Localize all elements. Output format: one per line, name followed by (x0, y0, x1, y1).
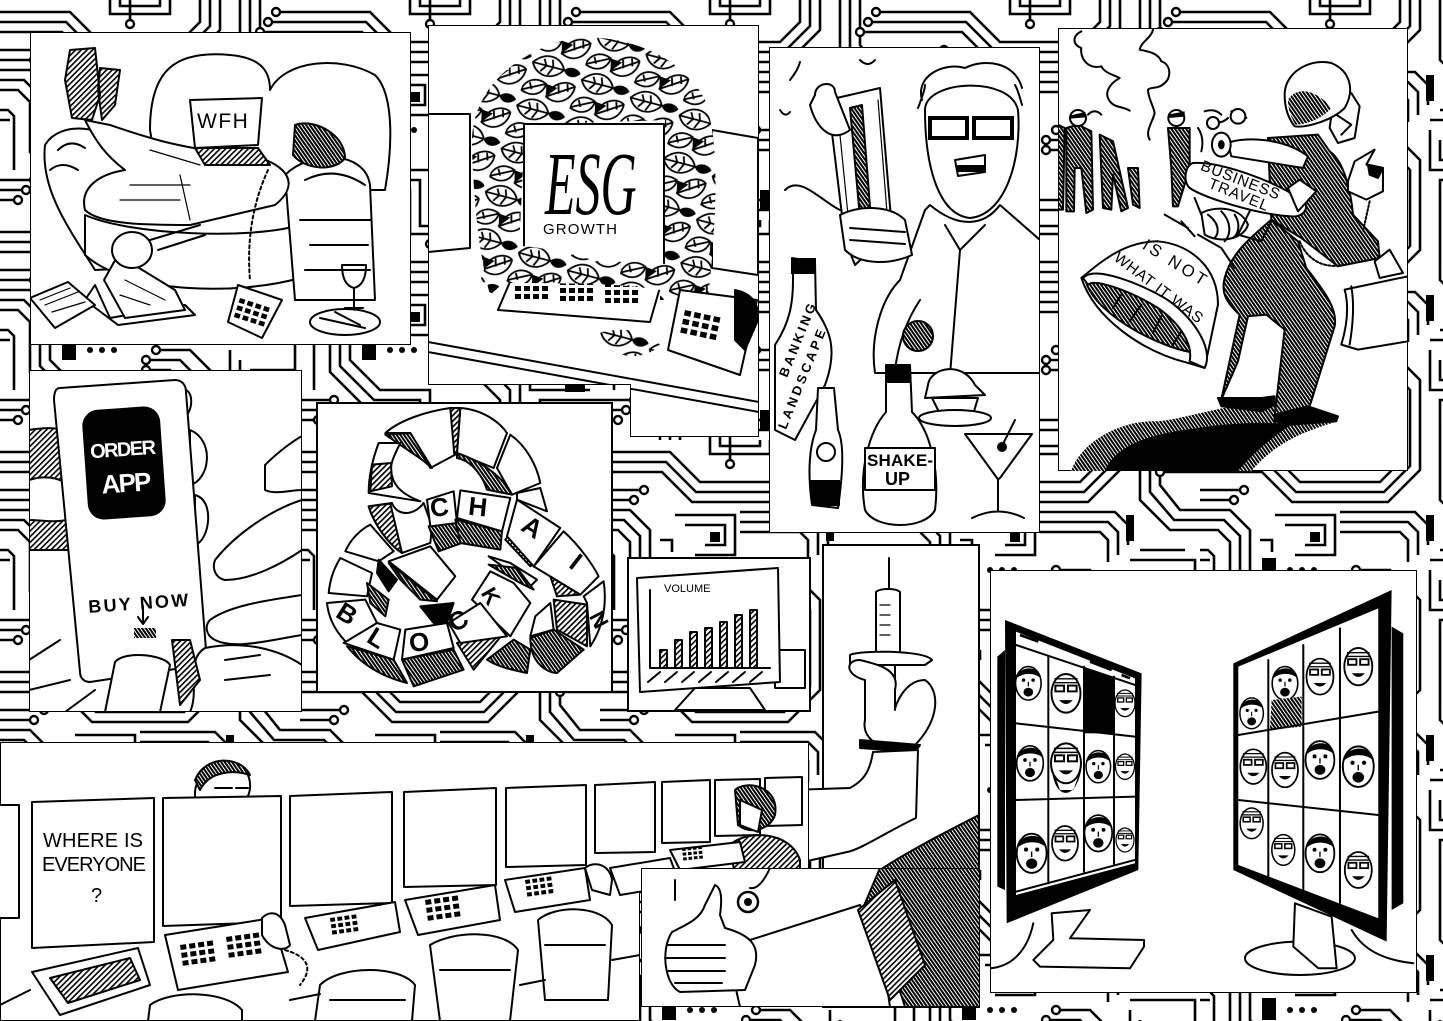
trousers (1221, 220, 1335, 416)
order app tile: ORDER (89, 437, 157, 463)
rocket nozzle: IS NOT (1139, 235, 1210, 289)
panel: video call monitors (990, 570, 1417, 993)
man's head with glasses (918, 63, 1022, 218)
lower hand and fingers (29, 436, 302, 712)
Business Travel tank: BUSINESS (1198, 158, 1282, 203)
torso and sleeve (1268, 135, 1380, 266)
Shake-Up bottle: UP (885, 469, 910, 489)
trailing ivy (595, 330, 660, 356)
upper loop blocks (369, 408, 547, 511)
telephones (262, 864, 612, 985)
crowd of onlookers (1058, 109, 1246, 213)
where is everyone text (42, 830, 146, 907)
word BLOCK: O (407, 626, 431, 658)
left monitor side ports (997, 650, 1005, 890)
right monitor side ports (1392, 627, 1403, 910)
panel: syringe and arm (790, 545, 979, 1007)
suit sleeve (877, 815, 979, 1007)
cocktail shaker (780, 60, 912, 265)
word BLOCK: L (362, 621, 392, 655)
word CHAIN: C (428, 491, 451, 523)
coffee mug (770, 650, 805, 688)
person lying on the sofa (65, 48, 345, 225)
smartphone (54, 380, 206, 682)
bar chart: VOLUME (664, 583, 710, 595)
bar chart (648, 583, 770, 682)
man peeking over monitors (195, 761, 250, 800)
word BLOCK: C (442, 603, 474, 638)
Banking Landscape bottle (775, 258, 832, 440)
word CHAIN: H (467, 491, 489, 523)
word CHAIN: I (564, 547, 588, 575)
Business Travel tank: TRAVEL (1206, 175, 1271, 215)
Shake-Up bottle: SHAKE- (867, 451, 933, 470)
panel: thumbs up (641, 868, 980, 1007)
desk telephone (668, 290, 758, 375)
ESG screen (524, 124, 664, 266)
ESG screen: ESG (544, 134, 637, 234)
Shake-Up bottle (863, 365, 936, 525)
Banking Landscape bottle: BANKING (776, 301, 819, 379)
rocket nozzle (1081, 235, 1218, 368)
man's shirt and body (874, 205, 1040, 375)
CHAIN blocks (427, 490, 605, 646)
forearm (735, 905, 890, 1007)
desk edges (0, 955, 640, 1005)
panel: ESG growth (428, 25, 759, 437)
thumbs up hand (665, 885, 756, 992)
panel: volume chart monitor (628, 558, 810, 711)
row of monitors (0, 777, 802, 948)
gloved hand (849, 660, 935, 752)
panel: order app (29, 370, 302, 712)
keyboard (481, 246, 665, 323)
arrow and barcode (138, 606, 148, 624)
curled fingers (665, 945, 725, 983)
small bottle (809, 388, 842, 508)
magazine (30, 282, 95, 328)
monitor stand (675, 688, 765, 710)
left monitor (1005, 620, 1142, 923)
order app tile (81, 405, 167, 521)
office chairs (148, 909, 612, 1021)
side monitors (428, 114, 758, 275)
coiled cord (1300, 241, 1341, 266)
panel: shake-up (769, 47, 1040, 533)
helmet head (1285, 62, 1360, 143)
martini glass (965, 420, 1032, 518)
word CHAIN: N (584, 607, 614, 633)
left middle blocks (329, 503, 455, 623)
right monitor (1233, 590, 1392, 942)
monitor (637, 568, 780, 692)
panel: blockchain knot (317, 403, 614, 692)
sleeve-free forearm (790, 750, 918, 865)
smoke plume (1074, 30, 1169, 140)
telephone keypad and cord (228, 170, 282, 338)
Business Travel tank (1186, 158, 1316, 216)
monitor cables (990, 923, 1413, 968)
syringe (850, 558, 932, 720)
BLOCK blocks (327, 600, 507, 686)
control desks with keypads (32, 842, 745, 1015)
woman at desk (730, 785, 800, 877)
holding hand (29, 389, 208, 550)
cupcake on plate (919, 369, 991, 426)
second shadow core (1105, 423, 1291, 471)
where is everyone text: EVERYONE (42, 854, 146, 876)
shoes (1218, 396, 1338, 425)
desk edge (428, 342, 759, 412)
hand with controller (1348, 150, 1383, 231)
baby with bottle (85, 225, 205, 325)
order app tile: APP (100, 466, 152, 500)
ivy wreath (472, 38, 716, 300)
ground shadow (1071, 403, 1338, 471)
shirt cuff stripes (858, 880, 925, 1000)
right monitor stand (1245, 903, 1355, 975)
buy now label: BUY NOW (88, 590, 189, 617)
panel: empty control room (0, 742, 809, 1021)
briefcase (1341, 250, 1408, 350)
rocket engine (1165, 198, 1271, 268)
panel: business travel (1058, 28, 1408, 471)
where is everyone text: ? (91, 885, 102, 907)
word BLOCK: K (476, 583, 506, 609)
word BLOCK: B (331, 596, 363, 631)
laptop with WFH text (190, 98, 270, 165)
sofa (44, 54, 390, 300)
ESG screen: GROWTH (543, 221, 617, 238)
word BLOCK (331, 583, 506, 658)
wine glass and plate (310, 265, 380, 335)
word CHAIN (428, 491, 614, 633)
word CHAIN: A (516, 509, 548, 545)
top oxygen tank (1212, 133, 1308, 168)
Banking Landscape bottle: LANDSCAPE (775, 327, 829, 431)
rocket nozzle: WHAT IT WAS (1111, 249, 1206, 327)
K block and lower blocks (457, 556, 584, 673)
cuff and sleeve (860, 868, 980, 1007)
panel: working from home (30, 32, 411, 345)
where is everyone text: WHERE IS (43, 830, 143, 852)
laptop with WFH text: WFH (197, 110, 249, 133)
left monitor stand (1033, 910, 1144, 968)
stethoscope (675, 868, 770, 912)
